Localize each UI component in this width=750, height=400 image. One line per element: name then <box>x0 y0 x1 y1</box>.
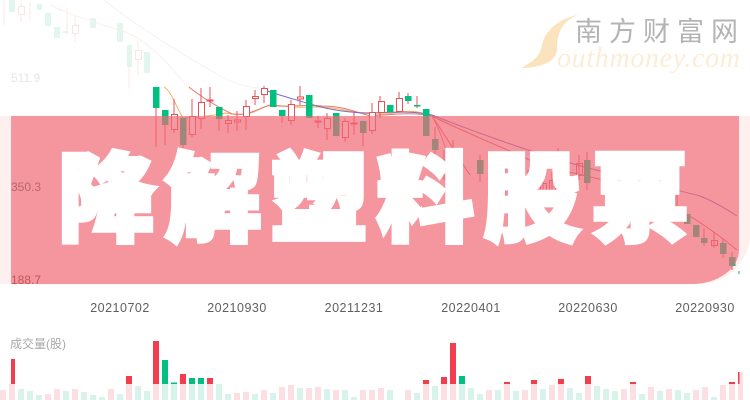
faded candlesticks top left <box>4 0 262 90</box>
pink banner <box>11 116 739 284</box>
date axis: 20210930 <box>207 301 267 315</box>
date axis: 20220630 <box>558 301 618 315</box>
pale side strips <box>0 116 750 284</box>
white area outside rounded corner <box>700 240 750 284</box>
axis label 350.3: 350.3 <box>11 180 41 194</box>
faint axis label 511.9: 511.9 <box>11 71 40 85</box>
date axis: 20220401 <box>441 301 501 315</box>
hollow red candles <box>172 88 718 246</box>
green candles <box>153 87 736 266</box>
title: 料 <box>376 146 474 254</box>
moving average lines <box>164 87 737 250</box>
title <box>58 146 688 254</box>
volume label: 成交量(股) <box>10 336 66 351</box>
logo chinese name: 南方财富网 <box>575 17 745 47</box>
date axis: 20211231 <box>325 301 383 315</box>
small teal mark <box>738 271 740 274</box>
logo swoosh <box>521 15 578 68</box>
title: 票 <box>592 146 688 254</box>
candlestick wicks <box>156 86 732 270</box>
title: 塑 <box>270 146 368 254</box>
volume bars green <box>162 360 465 384</box>
title: 降 <box>58 146 156 254</box>
volume bars red <box>11 341 740 384</box>
date axis: 20210702 <box>90 301 150 315</box>
volume bars pale <box>0 372 743 400</box>
title: 股 <box>484 146 580 254</box>
logo <box>521 15 745 74</box>
logo url: outhmoney.com <box>557 43 740 74</box>
volume bars pale green <box>18 384 717 400</box>
axis label 188.7: 188.7 <box>11 273 41 287</box>
date axis <box>90 301 735 315</box>
date axis: 20220930 <box>675 301 735 315</box>
title: 解 <box>164 146 262 254</box>
